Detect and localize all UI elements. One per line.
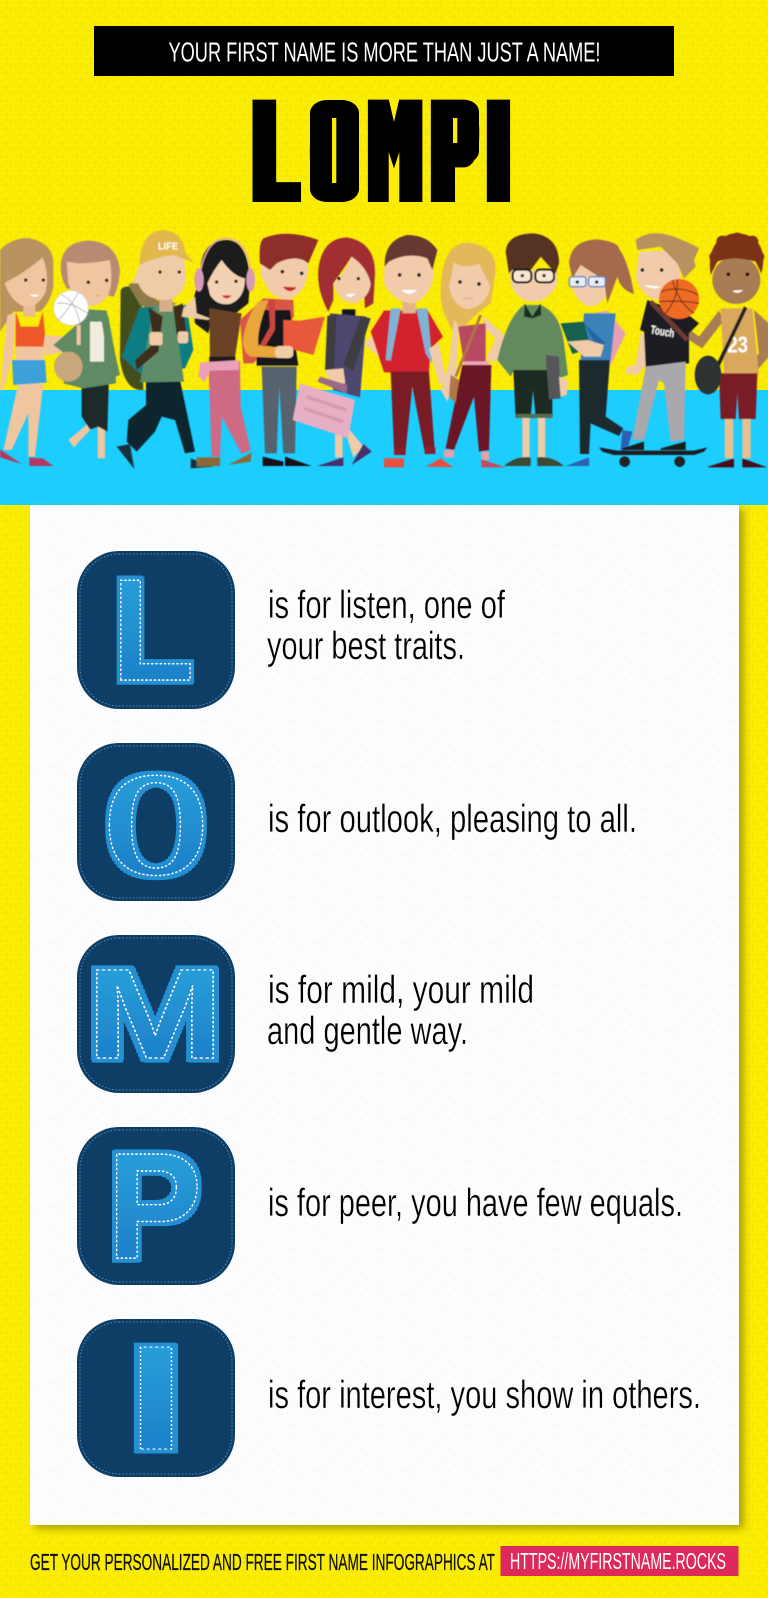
person 12: boy in yellow tank top [677, 233, 768, 467]
icon: letter O: O [103, 741, 209, 906]
icon: letter P: P [107, 1122, 202, 1291]
footer [30, 1546, 738, 1576]
icon: letter I [77, 1316, 235, 1481]
students, right half [364, 233, 768, 467]
person 6: girl in purple dress with pink bag [293, 237, 375, 466]
title: LOMPI [255, 71, 507, 231]
text: M line: and gentle way. [267, 1010, 468, 1053]
person 8: blonde girl [441, 243, 506, 467]
icon: letter L: L [112, 548, 194, 711]
title: LOMPI: L [255, 71, 296, 231]
title: LOMPI: M [371, 72, 419, 231]
person 4: girl with pink headphones [182, 238, 255, 467]
icon: letter I: I [126, 1316, 186, 1481]
person 10: girl with glasses, tablet and pink backpack [561, 239, 634, 466]
skateboard [599, 447, 707, 467]
text: M line [267, 969, 534, 1053]
person 3: hiker with cap and backpack [117, 230, 213, 469]
person 12: boy in yellow tank top: 23 [727, 332, 748, 358]
icon: letter L [77, 548, 235, 711]
white content panel [30, 505, 739, 1525]
row: letter O [77, 741, 637, 906]
person 3: hiker with cap and backpack: LIFE [158, 241, 178, 252]
text: L line: is for listen, one of [268, 584, 505, 627]
title: LOMPI: I [490, 72, 507, 231]
text: M line: is for mild, your mild [268, 969, 534, 1012]
person 11: skateboarder with basketball: Touch [649, 322, 676, 340]
icon: letter M: M [86, 943, 224, 1086]
text: L line: your best traits. [267, 625, 465, 668]
text: O line: is for outlook, pleasing to all. [268, 798, 637, 841]
icon: letter O [77, 741, 235, 906]
students, left half [0, 230, 375, 469]
icon: letter P [77, 1122, 235, 1291]
row: letter P [77, 1122, 683, 1291]
person 7: boy in red shirt with blue straps [364, 235, 453, 467]
person 2: girl with volleyball [53, 241, 120, 458]
person 11: skateboarder with basketball [622, 233, 699, 450]
title: LOMPI: P [434, 72, 474, 231]
row: letter I [77, 1316, 701, 1481]
person 5: boy reading a red book [240, 234, 325, 466]
person 9: boy with black glasses [497, 233, 568, 466]
title: LOMPI: O [315, 78, 354, 228]
text: L line [267, 584, 505, 668]
row: letter L [77, 548, 505, 711]
row: letter M [77, 935, 534, 1093]
top banner [94, 26, 674, 76]
blue floor band [0, 390, 768, 505]
person 1: girl in orange top [0, 238, 80, 466]
illustration: group of twelve students [0, 230, 768, 469]
